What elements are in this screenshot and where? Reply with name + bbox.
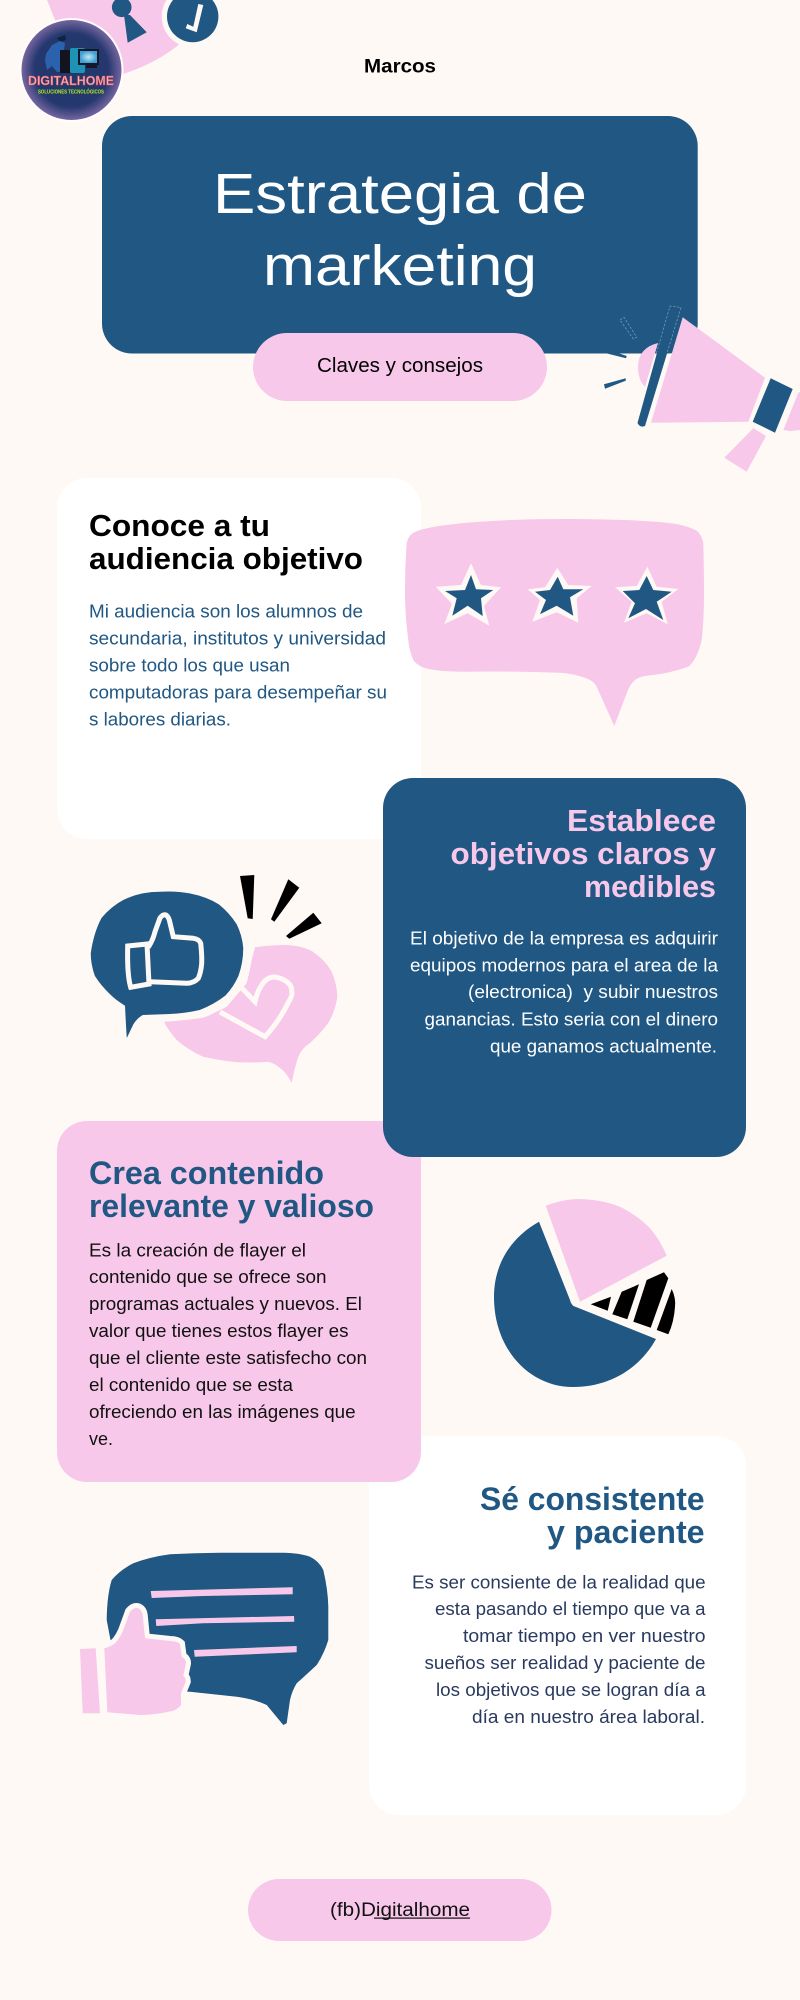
body text: (electronica) y subir nuestros (468, 982, 718, 1002)
body text: valor que tienes estos flayer es (89, 1321, 348, 1341)
chart: pie (494, 1199, 675, 1387)
logo name: DIGITALHOME (28, 73, 114, 88)
icon: megaphone (604, 306, 800, 472)
body text: esta pasando el tiempo que va a (435, 1599, 707, 1619)
panel: objectives (383, 778, 746, 1157)
heading: audiencia objetivo (89, 541, 363, 576)
body text: tomar tiempo en ver nuestro (463, 1626, 706, 1646)
body text: computadoras para desempeñar su (89, 682, 387, 702)
icon: speech bubble with three stars (405, 519, 704, 726)
title: Estrategia de (213, 162, 587, 226)
icon: thumbs up with chat bubble (80, 1553, 328, 1725)
body text: Mi audiencia son los alumnos de (89, 601, 363, 621)
author name: Marcos (364, 57, 436, 78)
body text: equipos modernos para el area de la (410, 955, 719, 975)
body text: sobre todo los que usan (89, 656, 290, 676)
body text: ve. (89, 1429, 113, 1449)
decorative corner illustration: lock and check (47, 0, 224, 75)
body text: que ganamos actualmente. (490, 1036, 717, 1056)
body text: ganancias. Esto seria con el dinero (424, 1010, 718, 1030)
body text: contenido que se ofrece son (89, 1267, 326, 1287)
logo: Digitalhome (20, 18, 124, 122)
footer pill: (fb)Digitalhome (330, 1900, 470, 1921)
title: marketing (263, 234, 537, 298)
logo tagline: SOLUCIONES TECNOLÓGICOS (38, 88, 104, 96)
body text: Es la creación de flayer el (89, 1240, 306, 1260)
subtitle pill (253, 333, 547, 401)
body text: s labores diarias. (89, 709, 231, 729)
body text: los objetivos que se logran día a (436, 1680, 707, 1700)
body text: secundaria, institutos y universidad (89, 628, 386, 648)
body text: El objetivo de la empresa es adquirir (410, 928, 718, 948)
body text: programas actuales y nuevos. El (89, 1294, 362, 1314)
panel: content (57, 1121, 421, 1482)
panel: consistency (369, 1436, 746, 1815)
body text: el contenido que se esta (89, 1375, 294, 1395)
body text: día en nuestro área laboral. (472, 1707, 705, 1727)
heading: Conoce a tu (89, 508, 270, 543)
heading: y paciente (547, 1514, 705, 1550)
heading: medibles (584, 869, 716, 904)
icon: thumbs up and heart speech bubbles (89, 875, 337, 1083)
heading: Sé consistente (480, 1481, 705, 1517)
panel: audience (57, 478, 421, 839)
footer pill (248, 1879, 552, 1941)
body text: sueños ser realidad y paciente de (424, 1653, 706, 1673)
body text: que el cliente este satisfecho con (89, 1348, 367, 1368)
heading: objetivos claros y (450, 836, 717, 871)
heading: Establece (567, 803, 716, 838)
heading: relevante y valioso (89, 1188, 374, 1224)
heading: Crea contenido (89, 1155, 324, 1191)
subtitle pill: Claves y consejos (317, 355, 483, 377)
body text: ofreciendo en las imágenes que (89, 1402, 356, 1422)
panel: title (102, 116, 698, 354)
body text: Es ser consiente de la realidad que (412, 1572, 706, 1592)
